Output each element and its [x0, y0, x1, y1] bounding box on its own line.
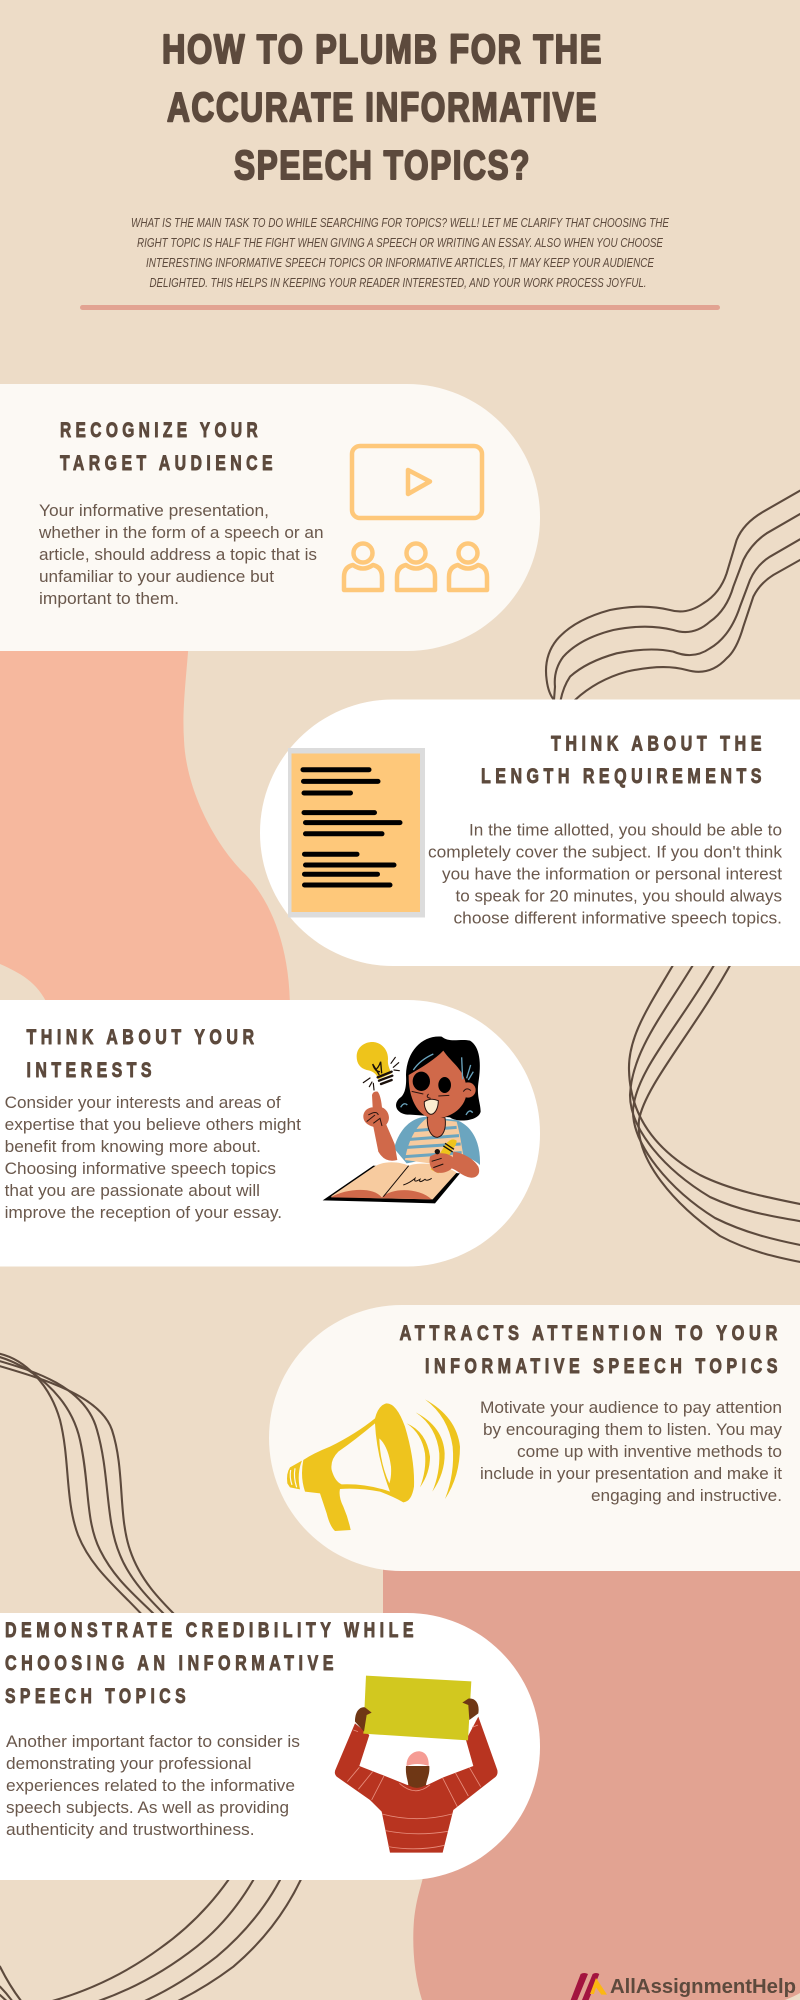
panel 3 body text: [5, 1093, 301, 1222]
panel 3 body text: that you are passionate about will: [5, 1181, 260, 1200]
panel 4 body text: [480, 1398, 782, 1505]
panel 1 heading: [60, 418, 277, 475]
panel: recognize your target audience: [0, 384, 540, 651]
intro text: DELIGHTED. THIS HELPS IN KEEPING YOUR READER INTERESTED, AND YOUR WORK PROCESS JOYFUL.: [150, 275, 646, 290]
megaphone body: [302, 1403, 414, 1531]
wavy lines: bottom left: [0, 1880, 301, 2000]
book page curves: [331, 1190, 432, 1199]
panel 5 heading: SPEECH TOPICS: [5, 1684, 190, 1708]
panel 1 body text: whether in the form of a speech or an: [38, 523, 323, 542]
sweater stripes: [347, 1725, 481, 1849]
panel: think about your interests: [0, 1000, 540, 1266]
striped top: [405, 1118, 463, 1167]
icon: document: [288, 748, 425, 918]
panel: demonstrate credibility: [0, 1613, 540, 1880]
panel 3 card: [0, 1000, 540, 1266]
panel 2 body text: In the time allotted, you should be able to: [469, 820, 782, 840]
panel 3 body text: improve the reception of your essay.: [5, 1203, 282, 1222]
panel 5 body text: Another important factor to consider is: [6, 1732, 300, 1751]
panel 5 body text: speech subjects. As well as providing: [6, 1798, 289, 1817]
megaphone grill: [287, 1461, 302, 1489]
panel 1 body text: article, should address a topic that is: [39, 545, 317, 564]
pointing hand: [363, 1091, 389, 1127]
panel 4 body text: come up with inventive methods to: [517, 1442, 782, 1461]
title: ACCURATE INFORMATIVE: [167, 84, 598, 130]
panel 1 heading: RECOGNIZE YOUR: [60, 418, 262, 442]
logo: AllAssignmentHelp: [571, 1973, 796, 2000]
icon: megaphone: [287, 1399, 460, 1531]
panel 1 body text: Your informative presentation,: [39, 501, 269, 520]
panel 4 body text: by encouraging them to listen. You may: [483, 1420, 782, 1439]
panel 4 heading: [400, 1321, 782, 1378]
panel 1 heading: TARGET AUDIENCE: [60, 451, 277, 475]
panel 5 body text: experiences related to the informative: [6, 1776, 295, 1795]
panel 2 body text: you have the information or personal interest: [442, 864, 782, 884]
logo wordmark: AllAssignmentHelp: [610, 1976, 796, 1998]
panel 5 heading: CHOOSING AN INFORMATIVE: [5, 1651, 338, 1675]
sound waves: [407, 1399, 460, 1499]
blue sweater: [394, 1117, 480, 1165]
panel 3 body text: benefit from knowing more about.: [5, 1137, 261, 1156]
sign board: [363, 1676, 471, 1740]
panel 3 body text: expertise that you believe others might: [5, 1115, 301, 1134]
panel 4 body text: include in your presentation and make it: [480, 1464, 782, 1483]
illustration: person holding up a sign: [335, 1676, 498, 1853]
wavy lines: top right: [546, 491, 800, 700]
panel 1 body text: [38, 501, 323, 608]
panel: think about the length requirements: [260, 700, 800, 966]
title: SPEECH TOPICS?: [234, 142, 531, 188]
neck: [427, 1117, 445, 1137]
panel 4 body text: Motivate your audience to pay attention: [480, 1398, 782, 1417]
intro text: [131, 215, 669, 290]
eyes: [413, 1072, 430, 1091]
writing arm and hand: [452, 1152, 479, 1178]
panel 2 heading: [481, 732, 766, 788]
panel 1 body text: important to them.: [39, 589, 179, 608]
panel 5 heading: DEMONSTRATE CREDIBILITY WHILE: [5, 1618, 418, 1642]
divider bar: [80, 305, 720, 310]
panel 5 card: [0, 1613, 540, 1880]
red sweater: [335, 1717, 498, 1853]
megaphone cone interior: [331, 1423, 390, 1492]
hands: [355, 1698, 479, 1732]
panel 2 body text: to speak for 20 minutes, you should always: [456, 886, 782, 906]
illustration: girl with light bulb writing in a book: [323, 1037, 481, 1203]
megaphone bell opening: [379, 1438, 391, 1483]
mouth: [424, 1099, 438, 1114]
pencil: [431, 1139, 457, 1173]
neck and head: [406, 1766, 429, 1788]
title: HOW TO PLUMB FOR THE: [162, 26, 603, 72]
icon: video screen and audience: [344, 446, 487, 590]
panel: attracts attention: [269, 1305, 800, 1571]
panel 3 heading: INTERESTS: [26, 1058, 156, 1082]
wavy lines: middle left: [0, 1353, 178, 1618]
background corner: cream: [785, 1993, 800, 2000]
hair highlights: [401, 1054, 473, 1115]
panel 2 body text: choose different informative speech topics.: [454, 908, 782, 928]
panel 5 body text: [6, 1732, 300, 1839]
panel 1 body text: unfamiliar to your audience but: [39, 567, 274, 586]
panel 2 body text: [428, 820, 782, 928]
wavy lines: middle right: [629, 960, 800, 1263]
panel 2 card: [260, 700, 800, 966]
open book: [323, 1166, 460, 1203]
bulb rays: [363, 1057, 399, 1090]
panel 3 body text: Choosing informative speech topics: [5, 1159, 276, 1178]
panel 5 body text: demonstrating your professional: [6, 1754, 252, 1773]
ear: [460, 1082, 476, 1098]
panel 4 body text: engaging and instructive.: [591, 1486, 782, 1505]
pink hat: [407, 1751, 429, 1766]
raised arm: [373, 1123, 397, 1161]
title: [162, 26, 603, 188]
logo mark: [571, 1973, 607, 2000]
panel 4 card: [269, 1305, 800, 1571]
panel 3 body text: Consider your interests and areas of: [5, 1093, 281, 1112]
background blob: salmon: [0, 640, 290, 1010]
light bulb: [357, 1042, 392, 1079]
panel 1 card: [0, 384, 540, 651]
panel 3 heading: [26, 1025, 258, 1082]
panel 5 heading: [5, 1618, 418, 1708]
panel 5 body text: authenticity and trustworthiness.: [6, 1820, 255, 1839]
wink marks and nose: [412, 1089, 471, 1098]
back hair and curls: [396, 1037, 481, 1121]
panel 3 heading: THINK ABOUT YOUR: [26, 1025, 258, 1049]
intro text: INTERESTING INFORMATIVE SPEECH TOPICS OR INFORMATIVE ARTICLES, IT MAY KEEP YOUR AUDIENCE: [146, 255, 654, 270]
face: [409, 1051, 467, 1118]
panel 2 body text: completely cover the subject. If you don't think: [428, 842, 782, 862]
background blob: rose: [383, 1560, 800, 2000]
